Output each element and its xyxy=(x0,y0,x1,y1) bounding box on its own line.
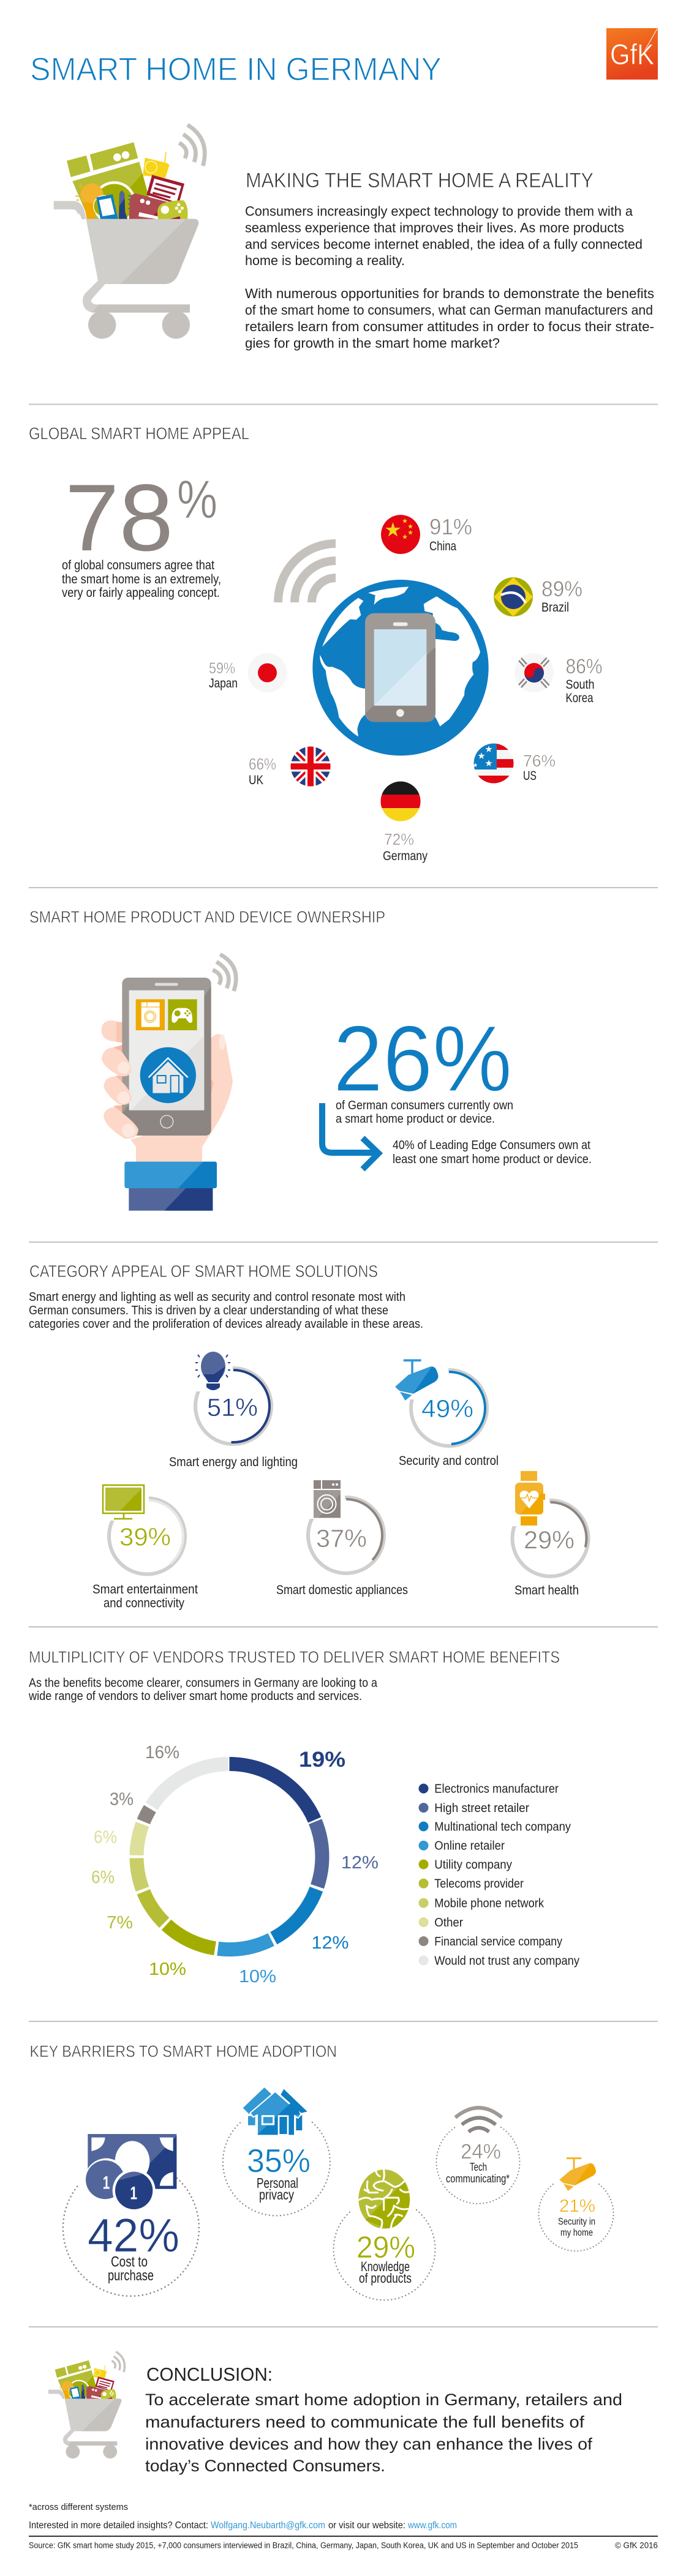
label: Japan xyxy=(209,660,238,691)
category intro text xyxy=(29,1290,423,1331)
conclusion text: To accelerate smart home adoption in Germany, retailers and xyxy=(145,2391,622,2409)
contact line: or visit our website: xyxy=(328,2520,405,2531)
ring: smart energy and lighting 51% xyxy=(191,1362,271,1444)
donut chart xyxy=(137,1764,322,1949)
label: Japan: 59% xyxy=(209,660,235,677)
vendors intro text: As the benefits become clearer, consumers in Germany are looking to a xyxy=(29,1676,378,1690)
vendors intro text xyxy=(28,1676,378,1703)
intro paragraph 1: seamless experience that improves their lives. As more products xyxy=(245,220,624,235)
icon: washing machine xyxy=(314,1480,341,1518)
callout: leading edge consumers: 40% of Leading Edge Consumers own at xyxy=(393,1139,590,1152)
label: smart domestic appliances: Smart domestic appliances xyxy=(276,1583,408,1597)
donut value labels: 7% xyxy=(107,1913,133,1933)
label: Germany xyxy=(383,830,428,863)
barrier: cost to purchase: 42% xyxy=(88,2209,179,2262)
intro paragraph 1: Consumers increasingly expect technology to provide them with a xyxy=(245,203,633,219)
donut value labels: 19% xyxy=(299,1748,345,1772)
legend: Financial service company xyxy=(434,1935,562,1949)
stat: 78%: 78 xyxy=(65,465,173,571)
conclusion text: today’s Connected Consumers. xyxy=(145,2457,385,2475)
label: Japan: Japan xyxy=(209,676,238,691)
legend xyxy=(419,1783,579,1968)
barrier: personal privacy: Personal xyxy=(257,2175,298,2191)
category intro text: German consumers. This is driven by a clear understanding of what these xyxy=(29,1304,388,1317)
donut value labels: 3% xyxy=(110,1790,134,1810)
intro heading: MAKING THE SMART HOME A REALITY xyxy=(246,169,594,192)
label: South Korea: 86% xyxy=(566,655,603,678)
legend: Electronics manufacturer xyxy=(434,1783,559,1796)
flag: UK xyxy=(290,747,331,786)
icon: wifi large xyxy=(278,544,336,602)
flag: Germany xyxy=(380,781,423,822)
barrier: knowledge of products: Knowledge xyxy=(361,2259,410,2274)
label: Brazil xyxy=(541,577,582,615)
barrier: security in my home: my home xyxy=(560,2228,593,2238)
category intro text: Smart energy and lighting as well as security and control resonate most with xyxy=(29,1290,405,1304)
intro paragraph 1 xyxy=(245,203,643,268)
barrier: tech communicating: 24% xyxy=(461,2140,501,2163)
flag: Japan xyxy=(247,653,287,692)
label: US: 76% xyxy=(523,752,556,770)
label: Germany: 72% xyxy=(384,830,414,848)
barrier: personal privacy: privacy xyxy=(259,2187,294,2203)
stat caption xyxy=(336,1099,513,1126)
flag: South Korea xyxy=(514,653,554,692)
conclusion text xyxy=(145,2391,622,2475)
ring: smart health 29% xyxy=(508,1497,588,1576)
stat caption: a smart home product or device. xyxy=(336,1112,495,1126)
legend: Other xyxy=(434,1916,463,1930)
legend: Online retailer xyxy=(434,1840,505,1853)
stat caption: the smart home is an extremely, xyxy=(62,572,221,586)
source line: Source: GfK smart home study 2015, +7,000 consumers interviewed in Brazil, China, Germany, Japan, South Korea, UK and US in September and October 2015 xyxy=(29,2541,578,2550)
ring: entertainment 39%: 39% xyxy=(119,1523,171,1551)
copyright: © GfK 2016 xyxy=(615,2541,658,2550)
vendors intro text: wide range of vendors to deliver smart home products and services. xyxy=(28,1690,362,1703)
intro paragraph 2 xyxy=(245,286,654,351)
intro paragraph 2: gies for growth in the smart home market? xyxy=(245,335,500,351)
label: China: 91% xyxy=(429,514,472,539)
stat: 78% xyxy=(65,465,217,571)
barrier: tech communicating: communicating* xyxy=(446,2173,510,2185)
stat: 26%: 26% xyxy=(333,1006,512,1111)
barrier: tech communicating xyxy=(436,2108,519,2204)
stat caption: of German consumers currently own xyxy=(336,1099,513,1112)
intro paragraph 2: retailers learn from consumer attitudes in order to focus their strate- xyxy=(245,319,654,334)
heading: category appeal: CATEGORY APPEAL OF SMART HOME SOLUTIONS xyxy=(29,1262,378,1281)
barrier: cost to purchase: 1 xyxy=(103,2173,110,2193)
icon: light bulb xyxy=(195,1352,230,1390)
flag: Brazil xyxy=(494,577,533,616)
donut value labels: 10% xyxy=(239,1967,276,1986)
intro paragraph 2: of the smart home to consumers, what can German manufacturers and xyxy=(245,302,653,318)
legend: Telecoms provider xyxy=(434,1878,524,1891)
icon: security camera xyxy=(395,1360,438,1401)
label: smart energy and lighting: Smart energy and lighting xyxy=(169,1455,298,1469)
donut value labels: 10% xyxy=(149,1960,186,1979)
label: smart health: Smart health xyxy=(514,1583,579,1598)
heading: global appeal: GLOBAL SMART HOME APPEAL xyxy=(29,424,249,443)
label: South Korea xyxy=(566,655,603,705)
stat caption: very or fairly appealing concept. xyxy=(62,586,220,600)
barrier: tech communicating: Tech xyxy=(470,2161,487,2173)
label: smart entertainment and connectivity: and connectivity xyxy=(104,1597,184,1610)
icon: hand holding phone xyxy=(102,954,236,1211)
ring: security and control 49%: 49% xyxy=(421,1395,473,1423)
barrier: security in my home: 21% xyxy=(559,2196,595,2216)
label: US xyxy=(523,752,556,783)
legend: Multinational tech company xyxy=(434,1821,571,1834)
callout: leading edge consumers: least one smart home product or device. xyxy=(393,1153,592,1166)
label: Germany: Germany xyxy=(383,849,428,863)
category intro text: categories cover and the proliferation of devices already available in these areas. xyxy=(29,1317,423,1331)
legend: High street retailer xyxy=(434,1802,529,1815)
label: UK: 66% xyxy=(249,755,276,773)
contact line xyxy=(29,2520,457,2531)
label: South Korea: South xyxy=(566,678,594,692)
barrier: security in my home xyxy=(538,2159,614,2251)
icon: smart watch xyxy=(515,1471,545,1526)
flag: China xyxy=(381,515,420,554)
ring: smart energy and lighting 51%: 51% xyxy=(207,1393,258,1421)
label: smart entertainment and connectivity: Smart entertainment xyxy=(92,1582,198,1597)
label: Brazil: Brazil xyxy=(541,601,569,615)
donut value labels: 6% xyxy=(94,1828,117,1848)
legend: Utility company xyxy=(434,1859,512,1872)
label: security and control: Security and control xyxy=(399,1454,499,1468)
contact line: Interested in more detailed insights? Contact: xyxy=(29,2520,208,2531)
intro paragraph 1: and services become internet enabled, the idea of a fully connected xyxy=(245,236,643,252)
barrier: knowledge of products: 29% xyxy=(356,2230,415,2264)
label: Brazil: 89% xyxy=(541,577,582,601)
icon: small shopping cart xyxy=(48,2352,124,2458)
legend: Would not trust any company xyxy=(434,1954,579,1968)
barrier: security in my home: Security in xyxy=(558,2217,595,2227)
intro paragraph 2: With numerous opportunities for brands to demonstrate the benefits xyxy=(245,286,654,301)
callout: leading edge consumers xyxy=(393,1139,592,1166)
donut value labels: 6% xyxy=(91,1868,115,1887)
barrier: cost to purchase xyxy=(63,2134,199,2296)
icon: shopping cart with smart devices xyxy=(54,125,205,339)
title: SMART HOME IN GERMANY xyxy=(30,51,442,88)
logo: GfK: GfK xyxy=(610,38,654,70)
barrier: personal privacy: 35% xyxy=(247,2143,311,2179)
stat caption xyxy=(62,558,221,600)
label: China: China xyxy=(429,539,456,553)
donut value labels: 12% xyxy=(341,1853,379,1873)
heading: barriers: KEY BARRIERS TO SMART HOME ADOPTION xyxy=(29,2042,337,2061)
label: UK: UK xyxy=(249,773,263,787)
label: South Korea: Korea xyxy=(566,691,594,705)
donut value labels: 12% xyxy=(311,1933,349,1953)
conclusion text: innovative devices and how they can enhance the lives of xyxy=(145,2435,593,2454)
contact line: www.gfk.com xyxy=(407,2520,457,2531)
footnote: *across different systems xyxy=(29,2502,128,2512)
stat: 78%: % xyxy=(177,469,217,530)
arrow xyxy=(322,1103,379,1169)
ring: entertainment 39% xyxy=(101,1494,185,1574)
barrier: personal privacy xyxy=(223,2087,330,2215)
icon: globe with phone xyxy=(312,580,489,755)
label: UK xyxy=(249,755,276,787)
icon: television xyxy=(103,1485,144,1519)
ring: domestic appliances 37%: 37% xyxy=(316,1524,367,1552)
legend: Mobile phone network xyxy=(434,1897,545,1911)
ring: domestic appliances 37% xyxy=(305,1494,384,1573)
intro paragraph 1: home is becoming a reality. xyxy=(245,253,405,268)
donut value labels: 16% xyxy=(145,1743,179,1762)
label: US: US xyxy=(523,769,537,783)
stat caption: of global consumers agree that xyxy=(62,558,214,572)
barrier: cost to purchase: purchase xyxy=(108,2267,154,2284)
barrier: knowledge of products: of products xyxy=(359,2271,412,2286)
flag: US xyxy=(474,743,513,784)
conclusion heading: CONCLUSION: xyxy=(146,2364,273,2385)
conclusion text: manufacturers need to communicate the full benefits of xyxy=(145,2413,585,2432)
heading: vendors: MULTIPLICITY OF VENDORS TRUSTED TO DELIVER SMART HOME BENEFITS xyxy=(29,1648,560,1666)
ring: security and control 49% xyxy=(404,1364,487,1446)
ring: smart health 29%: 29% xyxy=(524,1526,575,1554)
contact line: Wolfgang.Neubarth@gfk.com xyxy=(211,2520,325,2531)
barrier: cost to purchase: Cost to xyxy=(111,2254,148,2271)
donut value labels xyxy=(91,1743,379,1986)
label: China xyxy=(429,514,472,553)
heading: ownership: SMART HOME PRODUCT AND DEVICE OWNERSHIP xyxy=(29,908,385,926)
logo: GfK xyxy=(606,28,658,80)
barrier: cost to purchase: 1 xyxy=(130,2184,137,2204)
barrier: knowledge of products xyxy=(333,2170,435,2300)
label: smart entertainment and connectivity xyxy=(92,1582,198,1610)
